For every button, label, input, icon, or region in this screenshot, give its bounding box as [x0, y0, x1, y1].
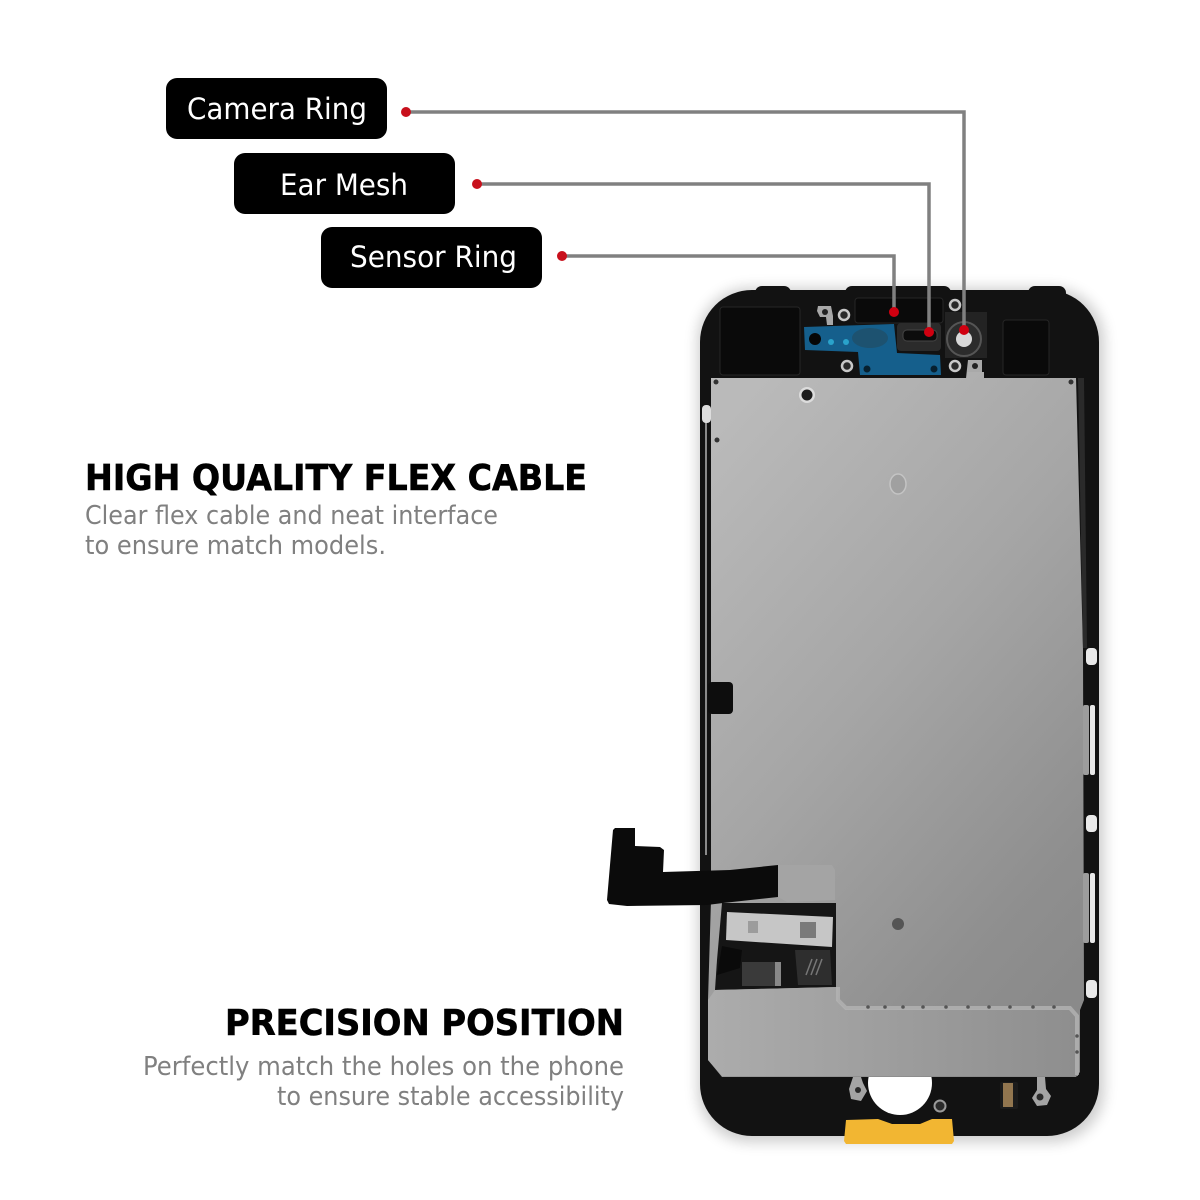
connector bay	[715, 903, 836, 990]
ear mesh	[897, 323, 941, 351]
metal shield plate	[708, 372, 1084, 1077]
callout: Camera Ring: Camera Ring	[187, 92, 367, 126]
lower plate left	[708, 987, 1078, 1076]
plate holes	[759, 387, 1047, 1044]
callout: Ear Mesh	[234, 153, 455, 214]
metal label with data matrix	[726, 912, 833, 947]
text block: flex cable description: Clear flex cable and neat interface	[85, 501, 498, 531]
callout: Ear Mesh: Ear Mesh	[280, 168, 408, 202]
bottom screw brackets	[849, 1077, 1051, 1112]
metal tab over cable	[778, 865, 835, 902]
leader line: ear mesh	[472, 179, 934, 337]
heading: precision position: PRECISION POSITION	[225, 1003, 624, 1044]
yellow protective tab	[844, 1119, 954, 1144]
heading: high quality flex cable: HIGH QUALITY FLEX CABLE	[85, 458, 587, 499]
right edge details	[1078, 378, 1097, 998]
text block: flex cable description: to ensure match models.	[85, 531, 386, 561]
lower plate seam with rivets	[838, 987, 1079, 1075]
camera ring	[945, 312, 987, 358]
blue flex sticker	[804, 324, 941, 375]
screws and brackets	[817, 300, 982, 378]
text block: flex cable description	[85, 501, 498, 561]
flex folds	[717, 946, 832, 986]
callout: Sensor Ring	[321, 227, 542, 288]
leader line: sensor ring	[557, 251, 899, 317]
phone screen assembly	[607, 286, 1104, 1144]
text block: precision description	[143, 1052, 624, 1112]
callout: Camera Ring	[166, 78, 387, 139]
top inner recesses	[720, 298, 1049, 375]
callout: Sensor Ring: Sensor Ring	[350, 240, 517, 274]
home button opening	[868, 1077, 932, 1115]
black flex cable	[607, 828, 778, 906]
phone shadow	[698, 288, 1104, 1142]
leader line: camera ring	[401, 107, 969, 335]
text block: precision description: Perfectly match the holes on the phone	[143, 1052, 624, 1082]
text block: precision description: to ensure stable accessibility	[277, 1082, 624, 1112]
left edge details	[702, 380, 1074, 855]
bottom connector	[1000, 1082, 1018, 1109]
phone frame	[700, 286, 1099, 1136]
